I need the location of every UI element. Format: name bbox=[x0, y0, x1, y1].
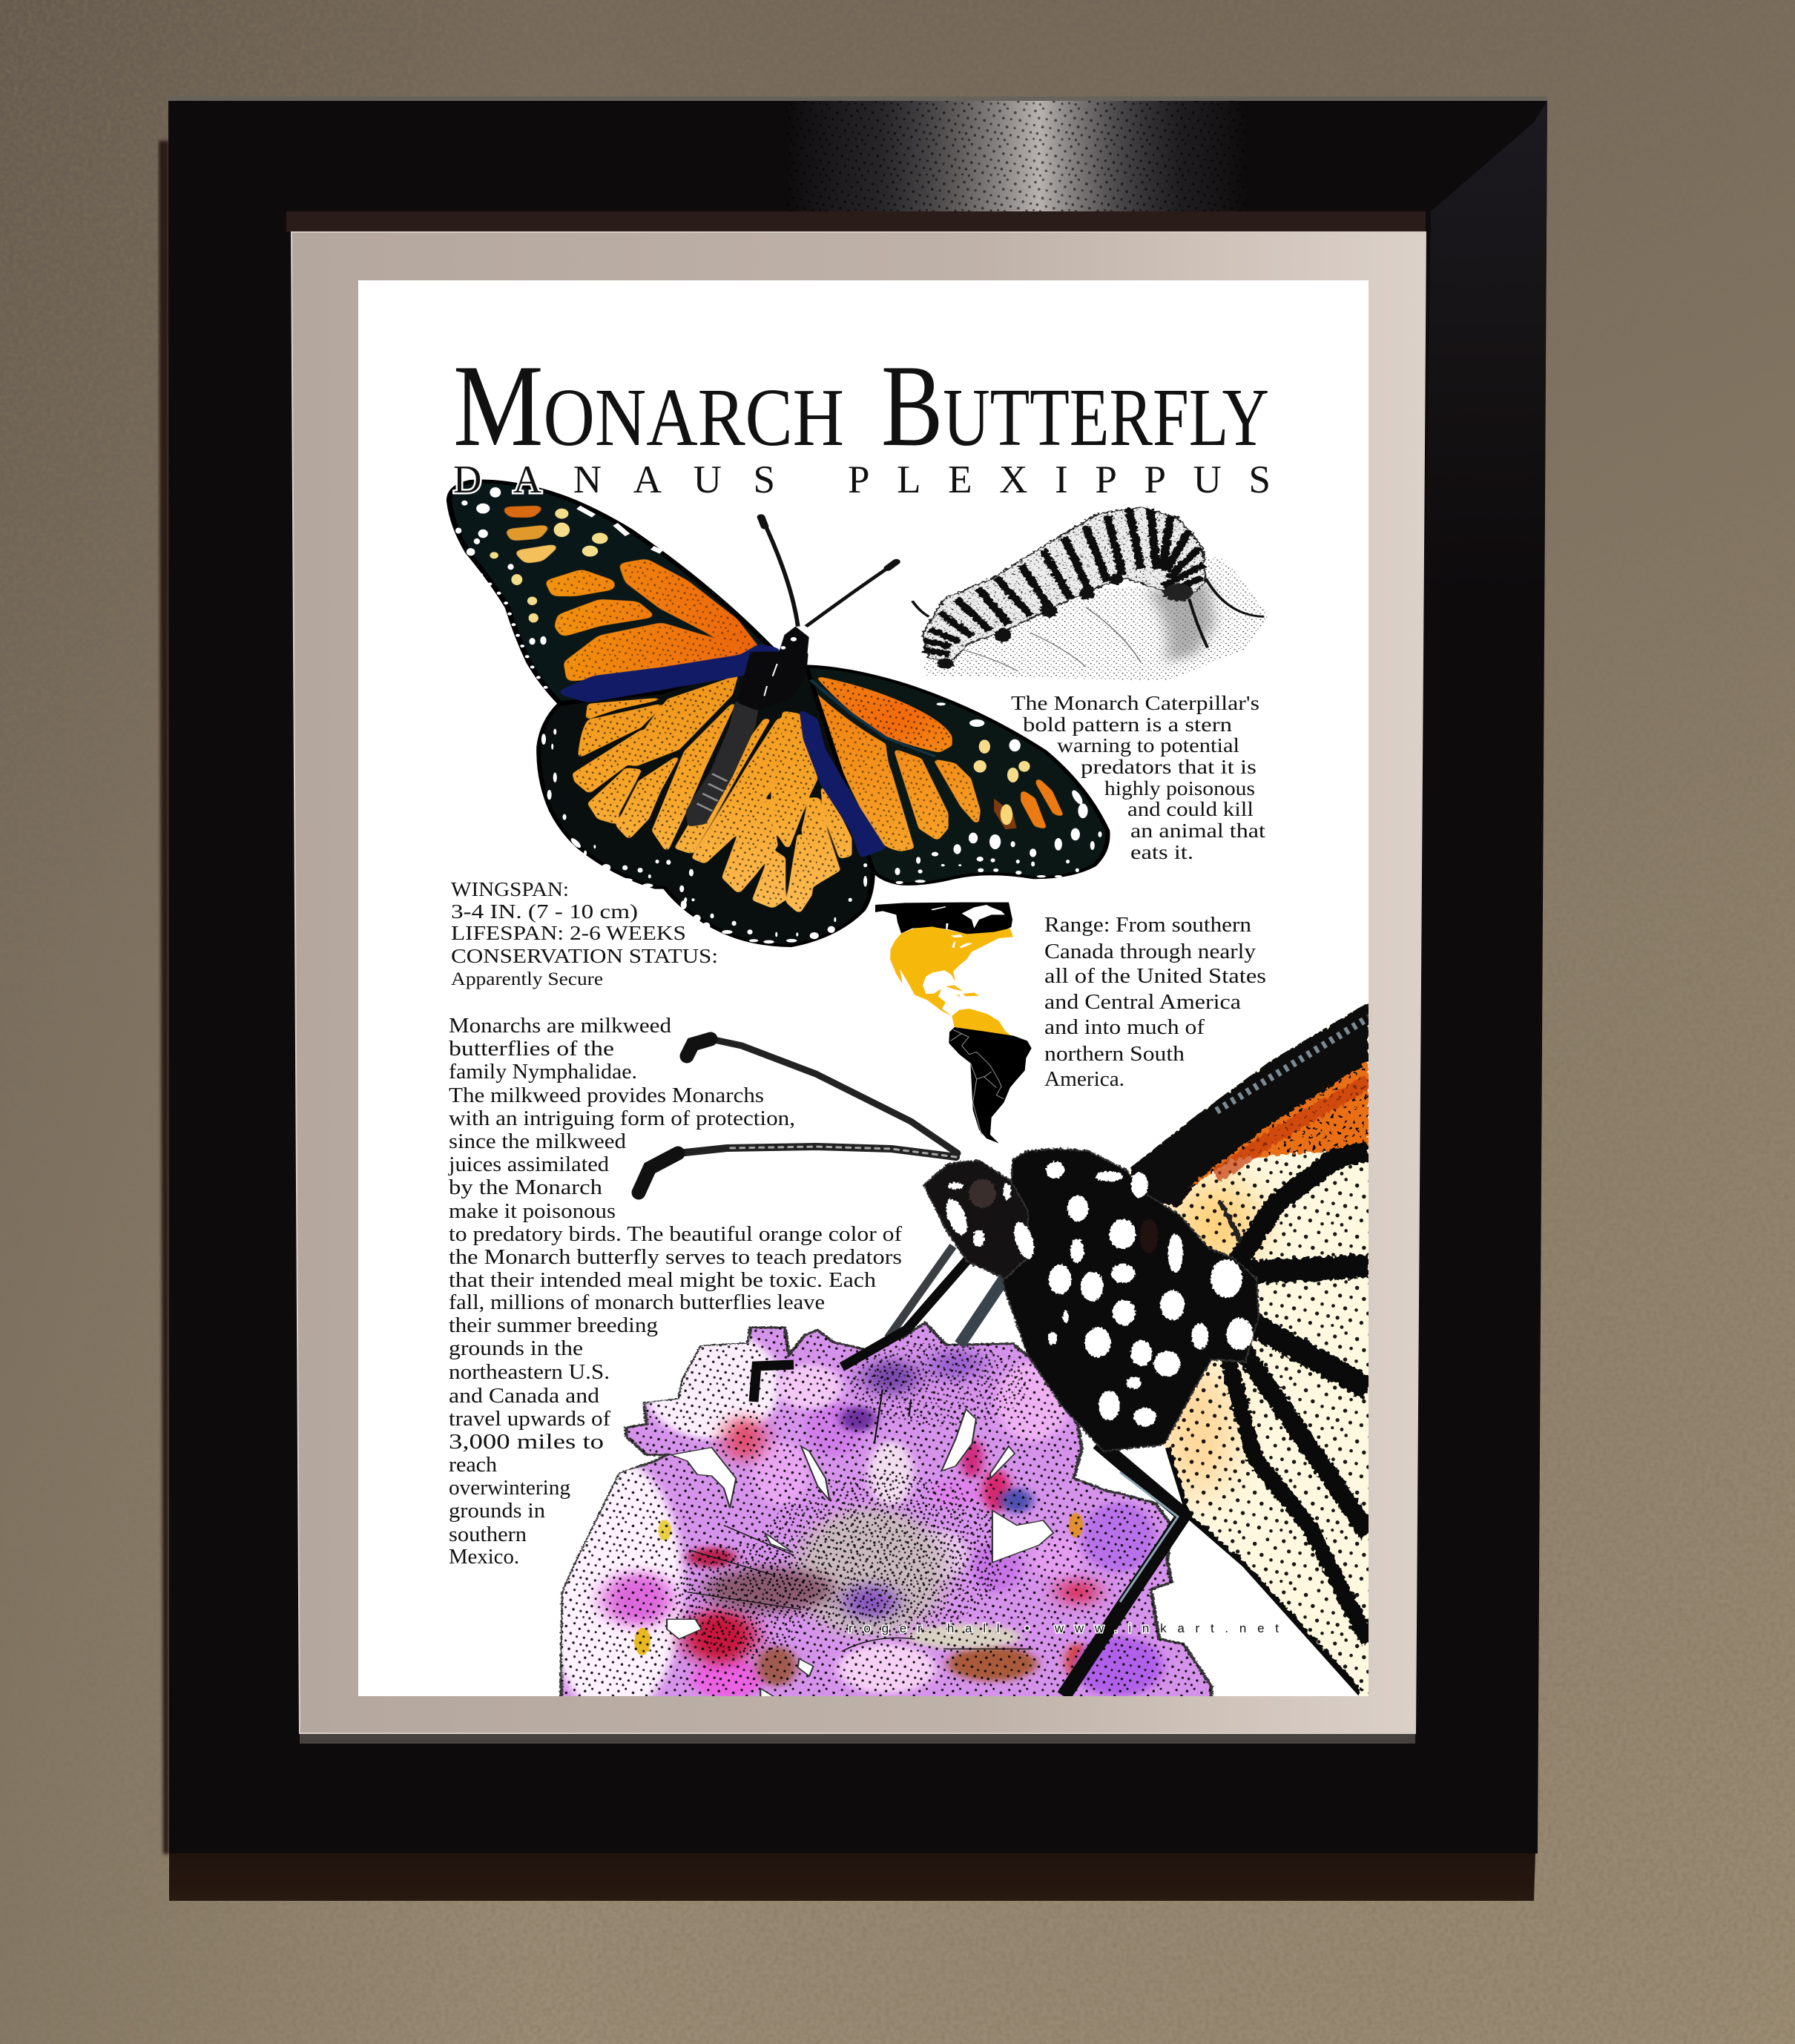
caterpillar caption: an animal that bbox=[1130, 820, 1266, 842]
wings seen from below: hindwing and right forewing bbox=[538, 666, 1107, 946]
right forewing bbox=[807, 666, 1107, 884]
species stats: Apparently Secure bbox=[451, 969, 603, 989]
main body text: by the Monarch bbox=[449, 1176, 602, 1199]
tentacles bbox=[912, 578, 1264, 647]
main body text: with an intriguing form of protection, bbox=[449, 1107, 795, 1130]
Canada and Alaska in black bbox=[875, 903, 1012, 934]
species stats: WINGSPAN: bbox=[451, 878, 569, 900]
caterpillar caption: and could kill bbox=[1127, 798, 1254, 820]
white poster print bbox=[358, 280, 1369, 1696]
left forewing bbox=[449, 481, 778, 703]
main body text: reach bbox=[449, 1454, 497, 1477]
northern South America range in yellow bbox=[952, 1009, 1011, 1035]
illustration: flower cluster bbox=[545, 1320, 1216, 1715]
main body text: to predatory birds. The beautiful orange color of bbox=[449, 1223, 903, 1246]
main body text: butterflies of the bbox=[449, 1038, 614, 1061]
range map of the Americas bbox=[875, 903, 1032, 1144]
close-up antennae bbox=[639, 1039, 958, 1193]
main body text: the Monarch butterfly serves to teach predators bbox=[449, 1246, 902, 1269]
main body text: travel upwards of bbox=[449, 1408, 611, 1431]
main body text: their summer breeding bbox=[449, 1314, 658, 1337]
flower stipple bbox=[549, 1320, 1216, 1698]
main body text: northeastern U.S. bbox=[449, 1361, 610, 1384]
title: Monarch bbox=[453, 341, 844, 471]
petal lines bbox=[687, 1389, 1033, 1652]
subtitle: scientific name: PLEXIPPUS bbox=[848, 458, 1271, 501]
main body text: and Canada and bbox=[449, 1385, 599, 1408]
caterpillar body bbox=[923, 507, 1206, 669]
range description: Canada through nearly bbox=[1044, 940, 1256, 963]
subtitle: scientific name bbox=[453, 458, 1271, 501]
title: Butterfly bbox=[881, 341, 1269, 471]
flower gaps bbox=[667, 1409, 1053, 1697]
main body text: grounds in the bbox=[449, 1337, 583, 1360]
range description: Range: From southern bbox=[1044, 913, 1252, 937]
main body text: fall, millions of monarch butterflies leave bbox=[449, 1291, 825, 1314]
range description: America. bbox=[1044, 1067, 1124, 1091]
range description bbox=[1044, 913, 1266, 1091]
main body text: family Nymphalidae. bbox=[449, 1061, 637, 1084]
head and antennae bbox=[761, 517, 896, 667]
range description: and Central America bbox=[1044, 990, 1241, 1014]
range description: all of the United States bbox=[1044, 964, 1266, 988]
caterpillar caption: predators that it is bbox=[1081, 756, 1256, 778]
leaf bbox=[923, 556, 1271, 681]
species stats: 3-4 IN. (7 - 10 cm) bbox=[451, 900, 638, 923]
Great Lakes bbox=[951, 934, 973, 948]
hindwing bbox=[538, 667, 935, 946]
caterpillar caption: bold pattern is a stern bbox=[1023, 713, 1233, 736]
picture frame bbox=[159, 96, 1547, 1901]
main body text: since the milkweed bbox=[449, 1130, 626, 1153]
main body text: grounds in bbox=[449, 1500, 545, 1523]
main body text: The milkweed provides Monarchs bbox=[449, 1084, 764, 1107]
caterpillar caption: highly poisonous bbox=[1104, 777, 1255, 800]
Hudson Bay and Arctic water bbox=[931, 905, 1005, 929]
main body text: juices assimilated bbox=[448, 1153, 609, 1176]
title bbox=[453, 341, 1269, 471]
main body text: southern bbox=[449, 1523, 527, 1546]
artist credit: roger hall • www.inkart.net bbox=[849, 1621, 1279, 1635]
navy vein band bbox=[801, 711, 884, 857]
species stats bbox=[451, 878, 718, 989]
body abdomen and thorax bbox=[688, 653, 807, 825]
main body text bbox=[448, 1015, 903, 1569]
close-up body with white spots bbox=[923, 1149, 1259, 1451]
main body text: 3,000 miles to bbox=[449, 1431, 604, 1454]
North and Central America range in yellow bbox=[890, 926, 1013, 1016]
main body text: make it poisonous bbox=[449, 1200, 616, 1223]
main body text: Mexico. bbox=[449, 1546, 519, 1569]
species stats: CONSERVATION STATUS: bbox=[451, 945, 718, 967]
species stats: LIFESPAN: 2-6 WEEKS bbox=[451, 922, 686, 944]
South America in black bbox=[949, 1027, 1032, 1144]
subtitle: scientific name: DANAUS bbox=[453, 458, 775, 501]
illustration: monarch butterfly with open wings bbox=[449, 481, 1107, 946]
illustration: caterpillar on milkweed leaf bbox=[912, 507, 1271, 681]
close-up legs bbox=[754, 1246, 1184, 1696]
range description: northern South bbox=[1044, 1042, 1185, 1066]
illustration: close-up monarch on flower bbox=[639, 994, 1372, 1698]
mat board bbox=[292, 232, 1426, 1733]
Caribbean islands bbox=[946, 985, 979, 996]
close-up wing bbox=[1113, 994, 1372, 1698]
caterpillar caption: warning to potential bbox=[1057, 734, 1239, 756]
main body text: Monarchs are milkweed bbox=[449, 1015, 671, 1038]
flower silhouette and petals bbox=[545, 1322, 1211, 1715]
national borders bbox=[951, 1029, 1004, 1135]
caterpillar caption: The Monarch Caterpillar's bbox=[1011, 692, 1259, 714]
range description: and into much of bbox=[1044, 1015, 1205, 1039]
main body text: that their intended meal might be toxic. Each bbox=[449, 1269, 876, 1292]
main body text: overwintering bbox=[449, 1477, 570, 1500]
caterpillar caption: eats it. bbox=[1130, 841, 1193, 863]
caterpillar caption bbox=[1011, 692, 1266, 863]
